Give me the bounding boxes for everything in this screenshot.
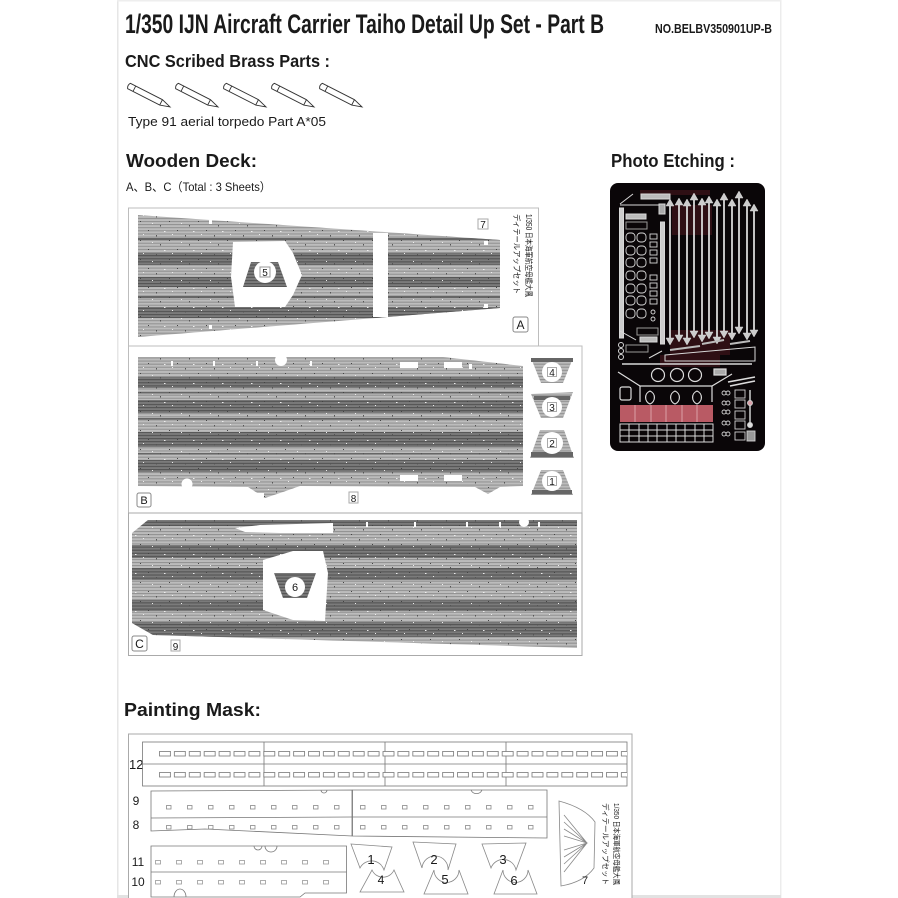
- mask vertical sheet text: [601, 803, 622, 885]
- mask part 12: 12: [129, 757, 143, 772]
- mask part 12: [129, 742, 627, 786]
- part 12 window strips: [159, 751, 627, 778]
- deck B cutouts: [171, 354, 472, 497]
- heading: photo etching: Photo Etching :: [611, 150, 735, 171]
- icon: torpedo 5: [319, 83, 363, 110]
- panel: wooden deck sheet A: [128, 208, 538, 346]
- heading: wooden deck: Wooden Deck:: [126, 150, 257, 171]
- part 5 trapezoid: 5: [262, 268, 268, 279]
- part 1 trapezoid: 1: [549, 477, 555, 488]
- part 2 trapezoid: 2: [549, 439, 555, 450]
- sheet letter A: [513, 317, 528, 332]
- torpedo icons: [127, 83, 363, 110]
- part number 9: [171, 640, 180, 653]
- heading: CNC scribed brass parts: CNC Scribed Brass Parts :: [125, 51, 330, 71]
- sheet letter C: C: [135, 637, 144, 651]
- part number 7: [478, 219, 488, 231]
- middle strips: [618, 340, 755, 364]
- mask vertical sheet text: 1/350 日本海軍航空母艦大鳳: [612, 803, 622, 885]
- panel: painting mask sheet: [128, 734, 632, 898]
- mask pair 3 and 6: [482, 843, 537, 894]
- panel: wooden deck sheet B: [128, 346, 582, 513]
- mask parts 11 and 10: 10: [131, 875, 145, 889]
- red fret tint: [640, 190, 730, 367]
- deck C planks: [130, 518, 580, 653]
- mask pair 1 and 4: 1: [367, 852, 375, 867]
- etched rods: [666, 191, 758, 345]
- part 1 trapezoid: [531, 470, 573, 495]
- icon: torpedo 3: [223, 83, 267, 110]
- red etched block: [620, 405, 713, 422]
- part 6 trapezoid: 6: [292, 582, 298, 594]
- sheet letter A: A: [516, 318, 525, 332]
- parts 11 and 10 windows: [155, 860, 335, 885]
- part number 7: 7: [480, 220, 486, 231]
- part 2 trapezoid: [530, 430, 574, 458]
- lower fittings: [618, 368, 755, 404]
- mask part 7: [559, 801, 595, 887]
- part number 9: 9: [173, 642, 179, 653]
- deck A planks: [130, 210, 505, 340]
- deck B planks: [130, 352, 530, 502]
- sheet letter B: [137, 493, 151, 507]
- torpedo caption: Type 91 aerial torpedo Part A*05: [128, 114, 326, 129]
- icon: torpedo 1: [127, 83, 171, 110]
- panel: photo etching fret: [610, 183, 765, 451]
- part 3 trapezoid: [531, 392, 573, 418]
- wooden deck sheet count: A、B、C（Total : 3 Sheets）: [126, 180, 271, 194]
- upper left frame and ovals: [620, 194, 670, 344]
- mask pair 1 and 4: [351, 844, 404, 892]
- mask parts 9 and 8: [133, 790, 547, 838]
- sheet letter B: B: [140, 495, 148, 507]
- title: 1/350 IJN Aircraft Carrier Taiho Detail Up Set - Part B: [125, 9, 604, 39]
- mask parts 9 and 8: 9: [133, 794, 140, 808]
- part number 8: 8: [351, 494, 357, 505]
- panel: wooden deck sheet C: [128, 513, 582, 656]
- mask pair 3 and 6: 6: [510, 873, 518, 888]
- icon: torpedo 2: [175, 83, 219, 110]
- heading: painting mask: Painting Mask:: [124, 699, 261, 720]
- sheet letter C: [132, 636, 147, 651]
- vertical sheet text: ディテールアップセット: [512, 214, 522, 294]
- part number 8: [349, 492, 358, 505]
- part 6 trapezoid: [274, 573, 316, 598]
- deck C cutouts: [235, 517, 540, 621]
- mask parts 11 and 10: [131, 846, 346, 897]
- mask pair 2 and 5: 5: [441, 872, 449, 887]
- part 4 trapezoid: 4: [549, 368, 555, 379]
- mask pair 2 and 5: [413, 842, 468, 894]
- part 3 trapezoid: 3: [549, 403, 555, 414]
- mask vertical sheet text: ディテールアップセット: [601, 803, 611, 885]
- product number: NO.BELBV350901UP-B: [655, 22, 772, 36]
- part 4 trapezoid: [531, 358, 573, 383]
- vertical sheet text: [512, 214, 534, 297]
- mask pair 2 and 5: 2: [430, 852, 438, 867]
- etched grid block: [620, 424, 713, 442]
- mask parts 11 and 10: 11: [132, 855, 145, 869]
- mask pair 3 and 6: 3: [499, 852, 507, 867]
- mask parts 9 and 8: 8: [133, 818, 140, 832]
- mask part 7: 7: [582, 875, 588, 887]
- deck A cutouts: [209, 220, 488, 329]
- mask pair 1 and 4: 4: [378, 873, 385, 887]
- vertical sheet text: 1/350 日本海軍航空母艦大鳳: [524, 214, 534, 297]
- icon: torpedo 4: [271, 83, 315, 110]
- part 5 trapezoid: [243, 261, 287, 287]
- right side small parts: [722, 390, 755, 441]
- parts 9 and 8 windows: [166, 805, 544, 830]
